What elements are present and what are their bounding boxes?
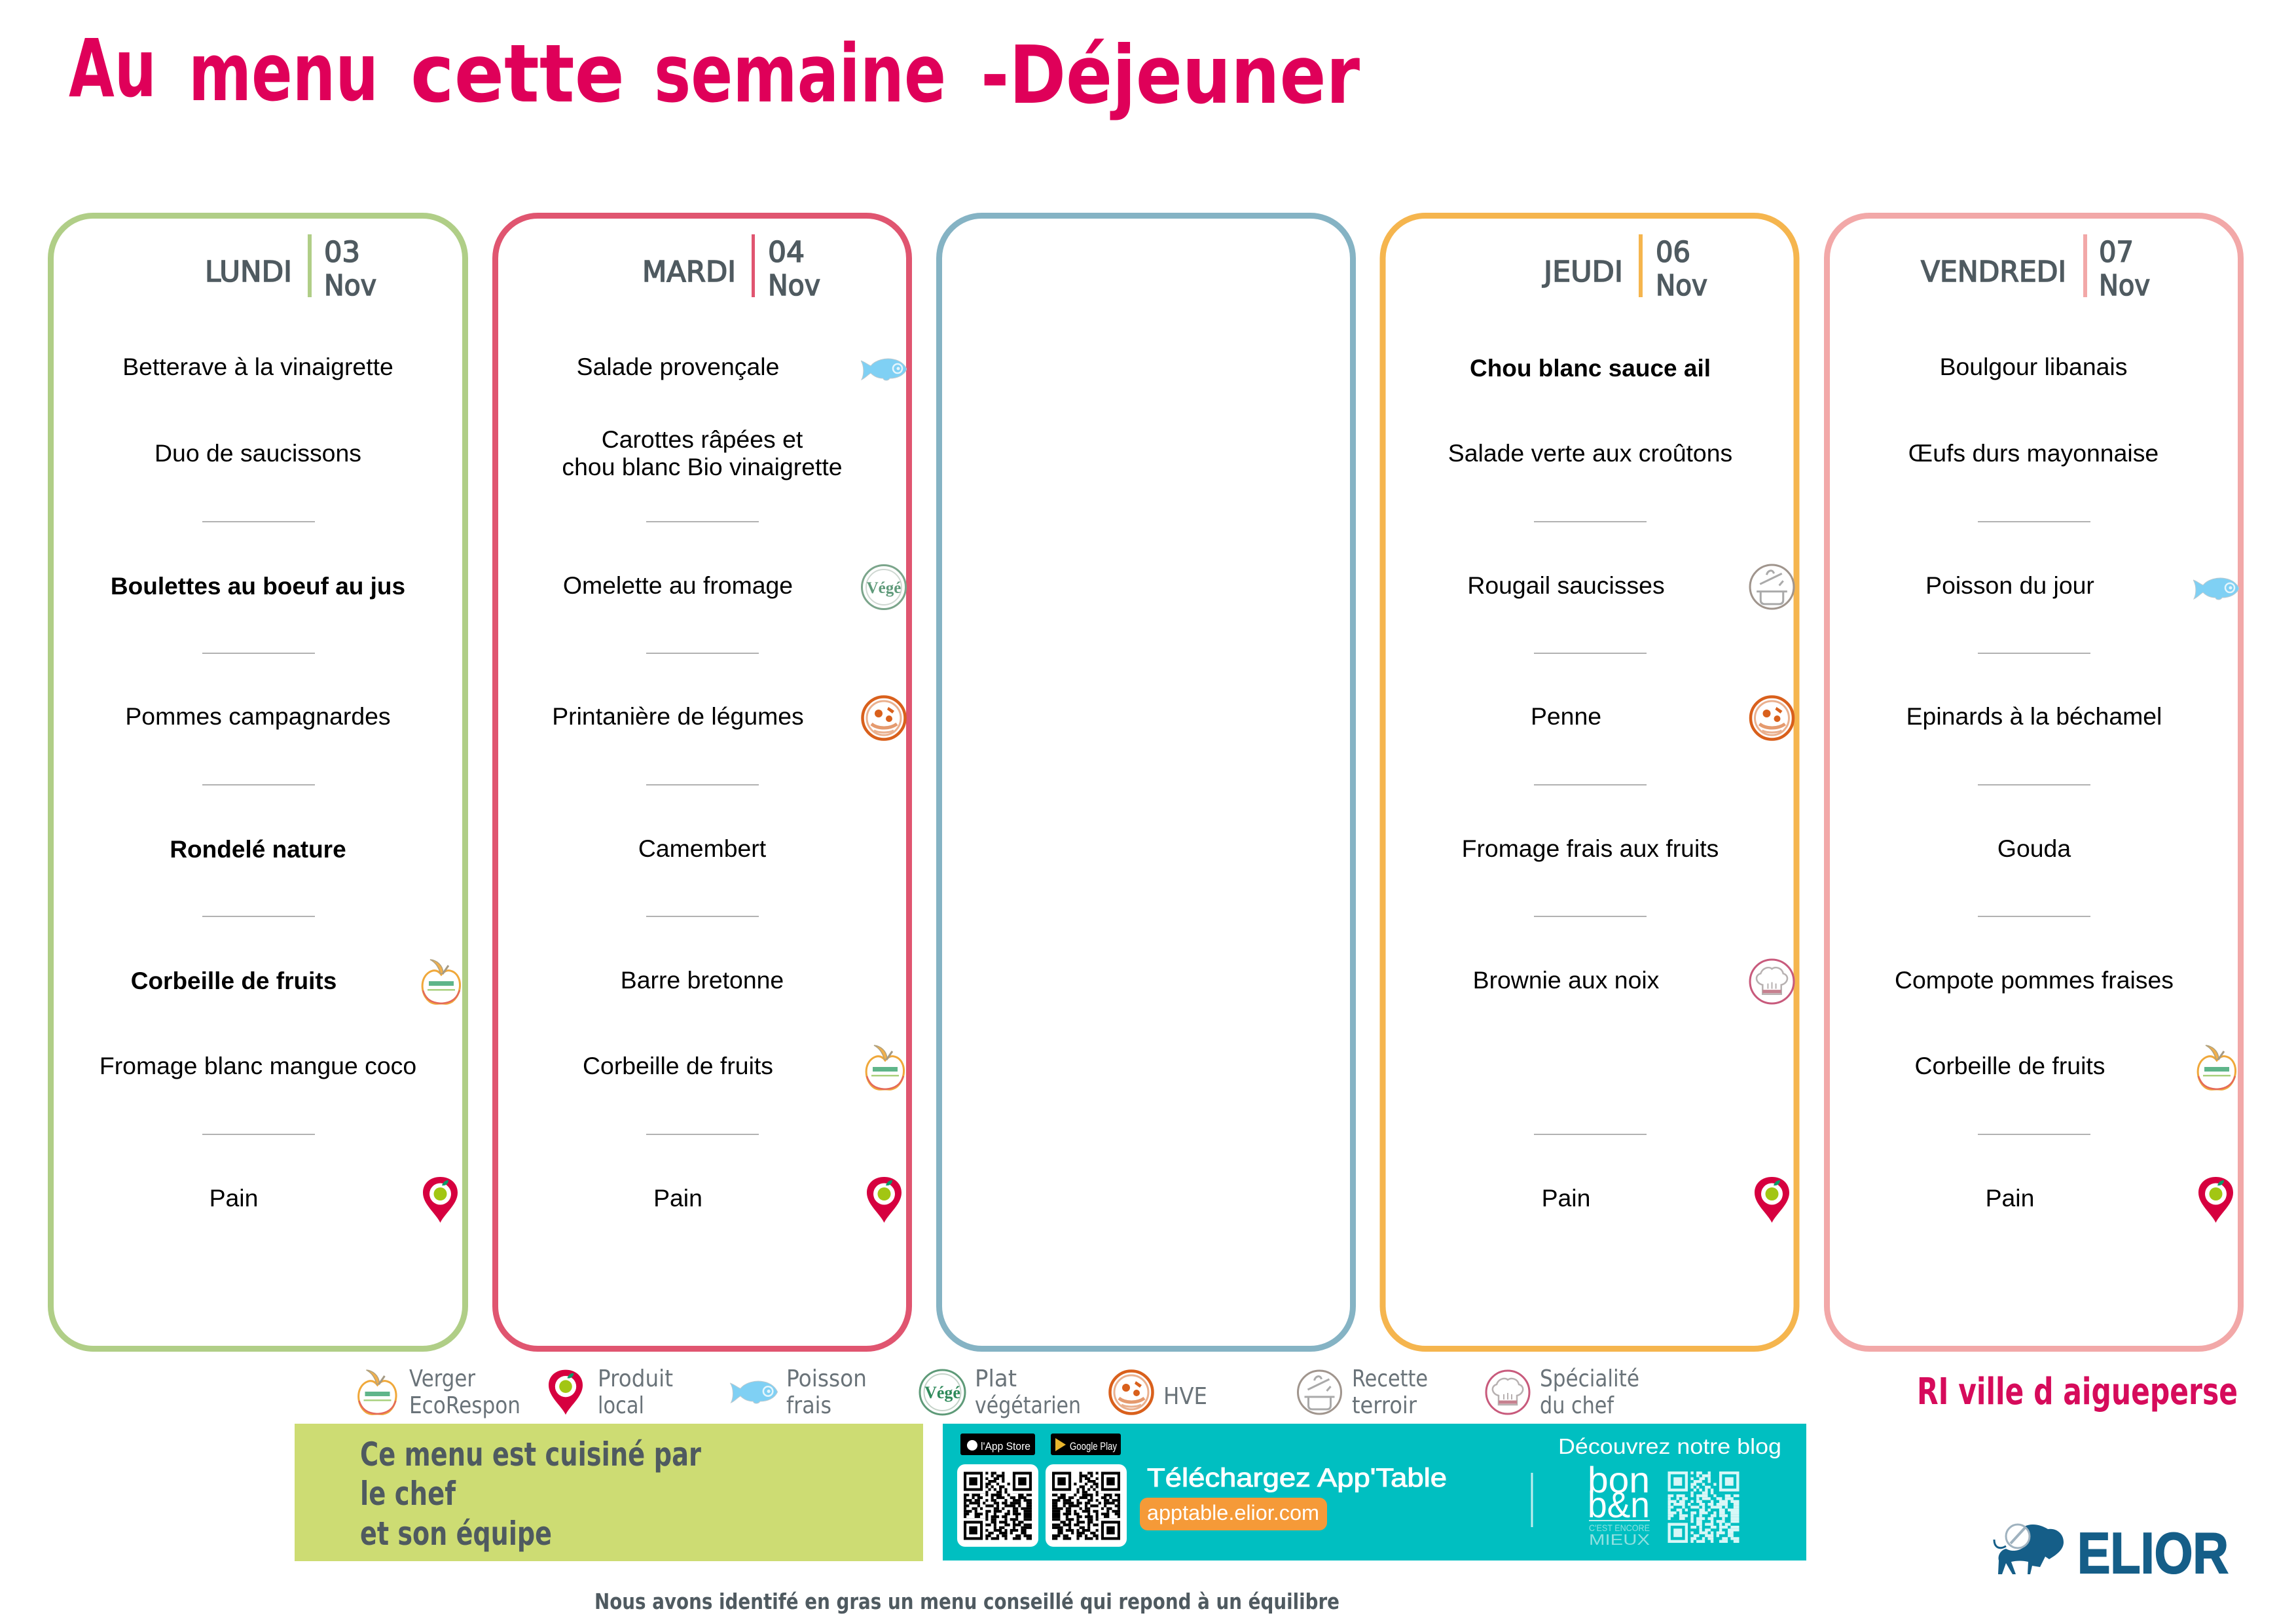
menu items: jeudi: Chou blanc sauce ail	[1470, 355, 1711, 382]
icon: végé	[862, 566, 906, 609]
menu items: lundi: Rondelé nature	[170, 836, 346, 863]
button: apptable url	[1140, 1498, 1327, 1530]
day heading: mardi: 04	[768, 236, 805, 269]
menu items: vendredi: Compote pommes fraises	[1895, 966, 2174, 994]
legend item: verger	[359, 1365, 520, 1419]
menu items: jeudi: Salade verte aux croûtons	[1448, 439, 1732, 467]
menu items: vendredi: Corbeille de fruits	[1915, 1052, 2105, 1079]
day heading: jeudi: 06	[1656, 236, 1690, 269]
legend item: plat végétarien	[920, 1365, 1081, 1419]
day heading: mardi: Nov	[768, 269, 820, 302]
menu items: lundi: Duo de saucissons	[155, 439, 361, 467]
icon: spécialité du chef	[1750, 960, 1794, 1003]
panel: lundi	[51, 216, 465, 1348]
legend item: produit local: local	[598, 1392, 644, 1419]
legend item: spécialité du chef: du chef	[1540, 1392, 1614, 1419]
panel: chef message: Ce menu est cuisiné par	[360, 1435, 701, 1473]
icon: poisson frais	[2193, 578, 2239, 600]
legend item: spécialité du chef	[1486, 1365, 1639, 1419]
legend item: poisson frais: Poisson	[786, 1365, 867, 1392]
icon: végé: Végé	[867, 579, 901, 597]
day heading: vendredi: 07	[2099, 236, 2134, 269]
menu items: mardi: Barre bretonne	[621, 966, 784, 994]
menu items: lundi: Pommes campagnardes	[125, 702, 391, 730]
legend item: recette terroir	[1298, 1365, 1428, 1419]
banner heading: Téléchargez App'Table	[1147, 1464, 1447, 1492]
panel: chef message: le chef	[360, 1475, 456, 1513]
icon: poisson frais	[861, 359, 907, 380]
panel: empty wednesday	[939, 216, 1353, 1348]
qr code: blog	[1668, 1471, 1739, 1543]
panel: vendredi	[1827, 216, 2240, 1348]
menu items: jeudi	[1448, 355, 1732, 1212]
day heading: lundi	[205, 234, 376, 302]
day heading: mardi: MARDI	[642, 255, 736, 289]
day heading: vendredi: VENDREDI	[1921, 255, 2066, 289]
day heading: vendredi	[1921, 234, 2150, 302]
icon: verger	[422, 960, 460, 1003]
button: apptable url: apptable.elior.com	[1147, 1501, 1319, 1525]
menu items: vendredi: Œufs durs mayonnaise	[1908, 439, 2159, 467]
menu items: lundi: Betterave à la vinaigrette	[122, 353, 393, 380]
menu items: vendredi: Gouda	[1997, 835, 2071, 862]
blog heading: Découvrez notre blog	[1558, 1434, 1781, 1458]
legend item: recette terroir: terroir	[1352, 1392, 1417, 1419]
menu items: vendredi: Epinards à la béchamel	[1906, 702, 2162, 730]
menu items: lundi: Corbeille de fruits	[131, 967, 337, 994]
menu items: vendredi: Boulgour libanais	[1940, 353, 2127, 380]
menu items: mardi	[552, 353, 843, 1212]
legend item: verger: EcoRespon	[409, 1392, 520, 1419]
menu items: vendredi: Poisson du jour	[1925, 571, 2094, 599]
menu items: mardi: Printanière de légumes	[552, 702, 804, 730]
day heading: jeudi: JEUDI	[1542, 255, 1623, 289]
legend item: spécialité du chef: Spécialité	[1540, 1365, 1639, 1392]
logo: bon and bien: C'EST ENCORE	[1589, 1523, 1650, 1533]
menu items: jeudi: Rougail saucisses	[1467, 571, 1665, 599]
menu items: mardi: Omelette au fromage	[563, 571, 793, 599]
icon: recette terroir	[1750, 565, 1794, 609]
day heading: jeudi: Nov	[1656, 269, 1707, 302]
badge: google play	[1051, 1434, 1121, 1455]
menu items: jeudi: Brownie aux noix	[1473, 966, 1660, 994]
icon: hve	[863, 696, 905, 740]
menu items: lundi	[100, 353, 416, 1212]
legend item: poisson frais: frais	[786, 1392, 831, 1419]
menu items: lundi: Fromage blanc mangue coco	[100, 1052, 416, 1079]
day heading: lundi: 03	[324, 236, 360, 269]
day heading: mardi	[642, 234, 820, 302]
icon: hve	[1751, 696, 1793, 740]
menu items: mardi: Corbeille de fruits	[583, 1052, 773, 1079]
logo: bon and bien: b&n	[1588, 1484, 1650, 1525]
legend item: hve	[1110, 1371, 1207, 1414]
panel: chef message	[295, 1424, 923, 1561]
title: Au	[69, 22, 156, 115]
legend item: produit local	[549, 1365, 673, 1419]
day heading: lundi: Nov	[324, 269, 376, 302]
legend	[359, 1365, 1639, 1419]
menu items: jeudi: Fromage frais aux fruits	[1462, 835, 1719, 862]
menu items: mardi: Camembert	[638, 835, 767, 862]
panel: chef message: et son équipe	[360, 1515, 552, 1553]
panel: jeudi	[1383, 216, 1796, 1348]
icon: produit local	[867, 1177, 902, 1223]
menu items: jeudi: Penne	[1531, 702, 1601, 730]
legend item: poisson frais	[731, 1365, 867, 1419]
menu items: lundi: Pain	[210, 1184, 258, 1212]
legend item: hve: HVE	[1163, 1383, 1207, 1410]
day heading: jeudi	[1542, 234, 1707, 302]
logo: bon and bien: MIEUX	[1589, 1531, 1650, 1548]
legend item: plat végétarien: Végé	[924, 1383, 960, 1402]
panel: mardi	[495, 216, 909, 1348]
menu items: lundi: Boulettes au boeuf au jus	[111, 573, 405, 600]
logo: elior: ELIOR	[2077, 1521, 2229, 1585]
menu items: mardi: Pain	[653, 1184, 702, 1212]
title	[69, 22, 1360, 122]
legend item: plat végétarien: végétarien	[975, 1392, 1081, 1419]
menu items: jeudi: Pain	[1542, 1184, 1590, 1212]
qr code: google play	[1046, 1464, 1127, 1547]
menu items: mardi: chou blanc Bio vinaigrette	[562, 453, 843, 480]
badge: app store: l'App Store	[981, 1440, 1030, 1453]
logo: bon and bien: bon	[1588, 1459, 1650, 1500]
menu items: vendredi	[1895, 353, 2174, 1212]
day heading: lundi: LUNDI	[205, 255, 292, 289]
footer note: Nous avons identifé en gras un menu conseillé qui repond à un équilibre	[594, 1589, 1339, 1614]
day heading: vendredi: Nov	[2099, 269, 2150, 302]
icon: verger	[866, 1045, 904, 1089]
icon: produit local	[2198, 1177, 2233, 1223]
title: semaine	[654, 27, 946, 120]
logo: bon and bien	[1588, 1459, 1650, 1548]
title: cette	[410, 27, 625, 120]
qr code: app store	[957, 1464, 1038, 1547]
legend item: plat végétarien: Plat	[975, 1365, 1017, 1392]
legend item: verger: Verger	[409, 1365, 475, 1392]
menu items: vendredi: Pain	[1986, 1184, 2034, 1212]
icon: produit local	[1755, 1177, 1789, 1223]
logo: elior	[1994, 1521, 2229, 1585]
icon: verger	[2198, 1045, 2236, 1089]
legend item: recette terroir: Recette	[1352, 1365, 1428, 1392]
menu items: mardi: Salade provençale	[577, 353, 779, 380]
panel: app banner	[943, 1424, 1806, 1561]
title: -Déjeuner	[981, 29, 1360, 122]
title: menu	[189, 26, 378, 119]
menu items: mardi: Carottes râpées et	[602, 425, 803, 453]
legend item: produit local: Produit	[598, 1365, 673, 1392]
badge: google play: Google Play	[1070, 1440, 1117, 1453]
badge: app store	[960, 1434, 1035, 1455]
icon: produit local	[423, 1177, 458, 1223]
